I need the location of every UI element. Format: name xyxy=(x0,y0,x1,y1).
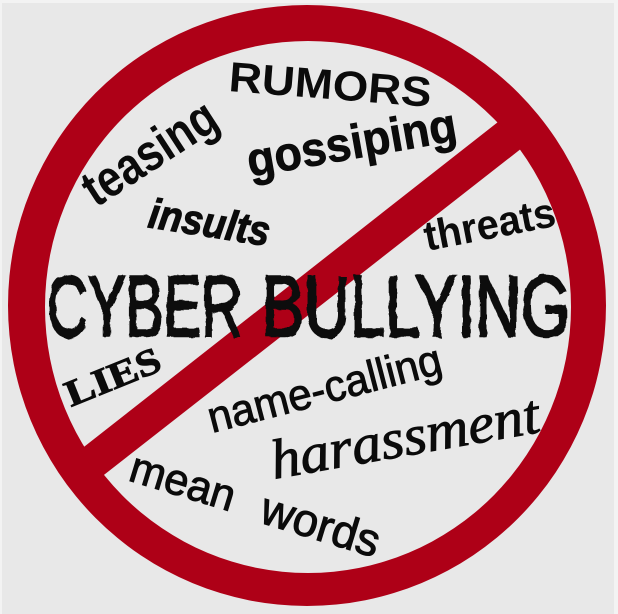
word: mean words: words xyxy=(254,482,387,567)
word: name-calling: name-calling xyxy=(202,335,447,443)
word: LIES: LIES xyxy=(59,340,167,415)
word: threats: threats xyxy=(420,188,559,260)
word: insults: insults xyxy=(146,189,273,255)
word: gossiping: gossiping xyxy=(243,99,461,188)
word: harassment: harassment xyxy=(265,383,546,492)
word: mean words xyxy=(124,443,387,567)
word: teasing: teasing xyxy=(71,88,228,218)
title: CYBER BULLYING: CYBER xyxy=(47,259,242,355)
title: CYBER BULLYING xyxy=(47,259,570,355)
word: RUMORS: RUMORS xyxy=(227,53,433,116)
word: mean words: mean xyxy=(124,443,242,521)
